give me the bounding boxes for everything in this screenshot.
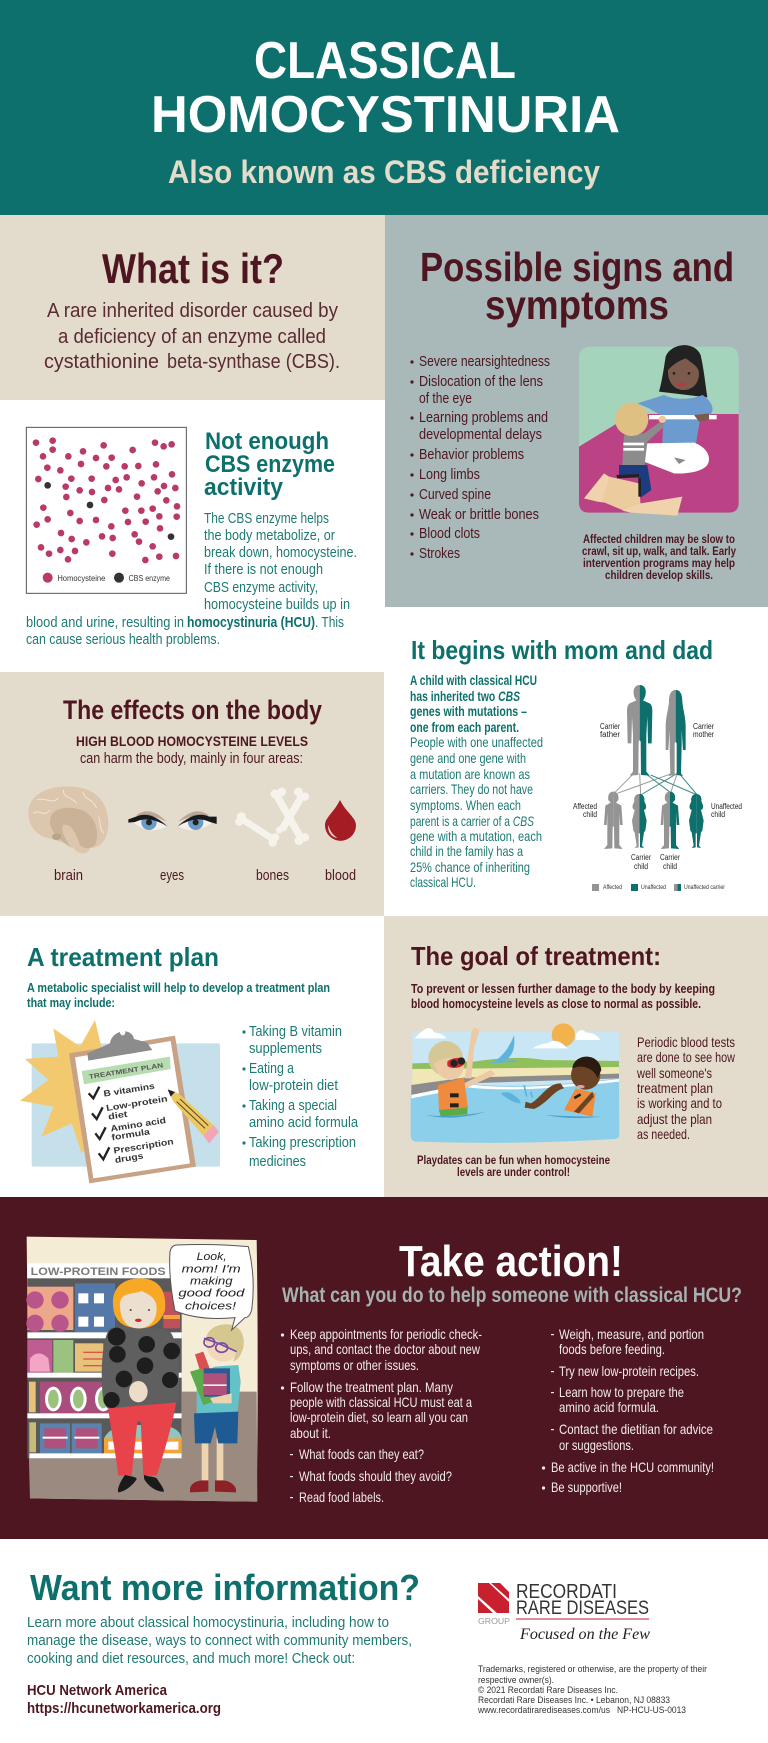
list: symptoms: Blood clots <box>419 525 480 542</box>
logo: Recordati Rare Diseases: RARE DISEASES <box>516 1598 649 1619</box>
heading: not enough CBS enzyme activity: CBS enzyme <box>205 451 335 478</box>
illustration: clipboard with treatment plan: Prescription <box>113 1136 174 1156</box>
chart: inheritance pedigree: Carrier <box>660 853 680 862</box>
chart: inheritance pedigree: child <box>634 862 648 871</box>
list: symptoms: Curved spine <box>419 486 491 503</box>
logo: Recordati Rare Diseases: Focused on the Few <box>519 1626 650 1643</box>
heading: not enough CBS enzyme activity: Not enough <box>205 428 329 455</box>
labels: body areas: eyes <box>160 867 184 884</box>
text: treatment plan intro: that may include: <box>27 996 115 1010</box>
chart: homocysteine dot diagram: Homocysteine <box>57 574 106 583</box>
list: treatment items: Taking B vitamin <box>249 1023 342 1040</box>
heading: effects on the body: The effects on the body <box>63 695 322 725</box>
caption: affected children: Affected children may be slow to <box>583 532 735 546</box>
illustration: low-protein foods aisle: mom! I'm <box>182 1263 241 1275</box>
panel: take action <box>0 1197 768 1539</box>
list: actions left column: low-protein diet, so learn all you can <box>290 1409 468 1425</box>
text: CBS enzyme explanation: break down, homocysteine. <box>204 544 357 561</box>
illustration: clipboard with treatment plan: diet <box>107 1109 128 1122</box>
text: periodic blood tests: is working and to <box>637 1095 722 1111</box>
caption: affected children: intervention programs may help <box>583 556 735 570</box>
list: treatment items <box>242 1023 359 1170</box>
text: periodic blood tests: Periodic blood tests <box>637 1034 735 1050</box>
illustration: clipboard with treatment plan: Amino acid <box>110 1115 167 1134</box>
legend: pedigree <box>592 884 725 891</box>
text: legal notice: www.recordatirarediseases.com/us <box>477 1705 610 1715</box>
legend: pedigree: Affected <box>603 885 622 891</box>
list: symptoms: Severe nearsightedness <box>419 353 550 370</box>
text: periodic blood tests <box>636 1034 736 1142</box>
text: periodic blood tests: treatment plan <box>637 1080 713 1096</box>
list: actions left column: Follow the treatment plan. Many <box>290 1379 453 1395</box>
text: definition: cystathionine <box>44 351 159 373</box>
text: definition: beta-synthase (CBS). <box>167 351 340 373</box>
list: actions right column: Learn how to prepare the <box>559 1384 684 1400</box>
text: inheritance explanation: child in the family has a <box>410 843 523 859</box>
list: symptoms: developmental delays <box>419 426 542 443</box>
list: actions left column: Read food labels. <box>299 1489 384 1505</box>
heading: want more information: Want more information? <box>30 1567 420 1608</box>
chart: inheritance pedigree: father <box>600 730 620 739</box>
title <box>151 32 620 144</box>
text: goal statement: To prevent or lessen further damage to the body by keeping <box>411 982 715 996</box>
illustration: low-protein foods aisle: LOW-PROTEIN FOODS <box>31 1266 166 1278</box>
caption: playdates: Playdates can be fun when homocysteine <box>417 1153 610 1167</box>
panel: want more information <box>0 1539 768 1743</box>
text: inheritance explanation: one from each parent. <box>410 719 519 735</box>
text: learn more: Learn more about classical homocystinuria, including how to <box>27 1614 389 1631</box>
text: treatment plan intro: A metabolic specialist will help to develop a treatment plan <box>27 981 330 995</box>
list: actions right column <box>542 1326 714 1495</box>
text: inheritance explanation: a mutation are known as <box>410 766 530 782</box>
list: actions left column: about it. <box>290 1425 331 1441</box>
text: legal notice: Recordati Rare Diseases Inc. • Lebanon, NJ 08833 <box>478 1695 670 1705</box>
text: inheritance explanation: carriers. They do not have <box>410 781 533 797</box>
illustration: clipboard with treatment plan: drugs <box>114 1151 144 1165</box>
chart: inheritance pedigree: Affected <box>573 802 597 811</box>
list: actions left column <box>281 1326 482 1505</box>
list: actions right column: Weigh, measure, and portion <box>559 1326 704 1342</box>
list: treatment items: Taking prescription <box>249 1134 356 1151</box>
text: inheritance explanation: classical HCU. <box>410 874 476 890</box>
list: actions right column: foods before feeding. <box>559 1341 665 1357</box>
text: treatment plan intro <box>27 981 330 1010</box>
list: treatment items: Taking a special <box>249 1097 337 1114</box>
text: inheritance explanation: gene and one gene with <box>410 750 526 766</box>
text: inheritance explanation: parent is a carrier of a CBS <box>410 813 534 829</box>
list: treatment items: medicines <box>249 1153 306 1170</box>
panel: the goal of treatment <box>384 916 768 1197</box>
list: actions left column: Keep appointments for periodic check- <box>290 1326 482 1342</box>
text: high blood homocysteine levels: can harm the body, mainly in four areas: <box>80 750 303 767</box>
text: high blood homocysteine levels: HIGH BLOOD HOMOCYSTEINE LEVELS <box>76 733 308 749</box>
text: inheritance explanation: gene with a mutation, each <box>410 828 542 844</box>
illustration: clipboard with treatment plan: B vitamins <box>103 1081 156 1099</box>
text: HCU Network America link: HCU Network America <box>27 1682 168 1699</box>
subtitle: Also known as CBS deficiency <box>168 154 600 190</box>
text: inheritance explanation: has inherited two CBS <box>410 688 520 704</box>
illustration: clipboard with treatment plan <box>20 1020 220 1183</box>
list: symptoms: Learning problems and <box>419 409 548 426</box>
panel: what is it <box>0 215 385 400</box>
text: definition <box>44 300 340 373</box>
text: goal statement: blood homocysteine levels as close to normal as possible. <box>411 997 701 1011</box>
text: learn more: manage the disease, ways to connect with community members, <box>27 1632 412 1649</box>
heading: possible signs and symptoms: symptoms <box>485 282 669 328</box>
text: definition: A rare inherited disorder caused by <box>47 300 338 322</box>
text: CBS enzyme explanation: blood and urine, resulting in <box>26 614 184 631</box>
legend: pedigree: Unaffected <box>641 885 666 891</box>
caption: affected children: crawl, sit up, walk, and talk. Early <box>582 544 736 558</box>
chart: inheritance pedigree: Unaffected <box>711 802 742 811</box>
heading: it begins with mom and dad: It begins with mom and dad <box>411 635 713 665</box>
text: periodic blood tests: well someone's <box>636 1065 712 1081</box>
list: treatment items: low-protein diet <box>249 1077 339 1094</box>
chart: inheritance pedigree: mother <box>693 730 714 739</box>
list: actions right column: Contact the dietitian for advice <box>559 1421 713 1437</box>
legend: pedigree: Unaffected carrier <box>684 885 725 891</box>
list: actions right column: or suggestions. <box>559 1437 634 1453</box>
text: CBS enzyme explanation: homocysteine builds up in <box>204 596 350 613</box>
list: actions right column: amino acid formula. <box>559 1399 659 1415</box>
text: HCU Network America link <box>27 1682 221 1717</box>
labels: body areas: bones <box>256 867 289 884</box>
text: inheritance explanation: A child with classical HCU <box>410 672 537 688</box>
labels: body areas: brain <box>54 867 83 884</box>
list: treatment items: amino acid formula <box>249 1114 359 1131</box>
logo: Recordati Rare Diseases <box>478 1580 650 1643</box>
illustration: low-protein foods aisle: making <box>190 1275 233 1287</box>
illustration: low-protein foods aisle <box>26 1237 258 1502</box>
text: periodic blood tests: adjust the plan <box>637 1111 712 1127</box>
illustration: mother and child <box>579 345 739 516</box>
icon: brain <box>28 786 108 853</box>
icon: eyes <box>128 811 217 830</box>
text: inheritance explanation: People with one unaffected <box>410 734 543 750</box>
text: inheritance explanation <box>410 672 543 890</box>
chart: inheritance pedigree: child <box>711 810 725 819</box>
illustration: low-protein foods aisle: good food <box>178 1288 245 1300</box>
text: periodic blood tests: are done to see how <box>637 1049 736 1065</box>
text: legal notice: NP-HCU-US-0013 <box>617 1705 686 1715</box>
text: inheritance explanation: 25% chance of inheriting <box>410 859 530 875</box>
chart: homocysteine dot diagram: CBS enzyme <box>129 574 170 583</box>
list: symptoms: of the eye <box>419 390 472 407</box>
title: HOMOCYSTINURIA <box>151 86 620 144</box>
illustration: clipboard with treatment plan: TREATMENT PLAN <box>89 1062 164 1081</box>
text: CBS enzyme explanation: homocystinuria (HCU) <box>187 614 315 631</box>
list: actions left column: What foods should they avoid? <box>299 1468 452 1484</box>
chart: homocysteine dot diagram <box>26 427 186 593</box>
panel: possible signs and symptoms <box>385 215 768 607</box>
text: legal notice <box>477 1664 707 1715</box>
text: goal statement <box>411 982 715 1011</box>
text: CBS enzyme explanation: . This <box>315 614 344 631</box>
text: CBS enzyme explanation: If there is not enough <box>204 561 323 578</box>
list: actions left column: people with classical HCU must eat a <box>290 1394 472 1410</box>
panel: a treatment plan <box>0 916 384 1197</box>
list: actions right column: Try new low-protein recipes. <box>559 1363 699 1379</box>
list: actions right column: Be active in the HCU community! <box>551 1459 714 1475</box>
text: legal notice: © 2021 Recordati Rare Diseases Inc. <box>478 1685 618 1695</box>
heading: what is it: What is it? <box>102 245 284 292</box>
text: HCU Network America link: https://hcunetworkamerica.org <box>27 1700 221 1717</box>
list: symptoms <box>410 353 550 562</box>
heading: take action: Take action! <box>399 1237 623 1286</box>
logo: Recordati Rare Diseases: GROUP <box>478 1617 510 1626</box>
chart: inheritance pedigree: Carrier <box>631 853 651 862</box>
list: actions right column: Be supportive! <box>551 1479 622 1495</box>
heading: the goal of treatment: The goal of treatment: <box>411 941 661 971</box>
text: definition: a deficiency of an enzyme called <box>58 326 326 348</box>
heading: not enough CBS enzyme activity: activity <box>204 474 284 501</box>
labels: body areas: blood <box>325 867 356 884</box>
icon: blood drop <box>325 800 356 841</box>
list: treatment items: Eating a <box>249 1060 295 1077</box>
title: CLASSICAL <box>254 32 516 90</box>
caption: affected children: children develop skills. <box>605 568 713 582</box>
text: learn more <box>27 1614 412 1667</box>
illustration: kids playing in pool <box>411 1023 619 1143</box>
illustration: low-protein foods aisle: choices! <box>185 1300 237 1312</box>
text: CBS enzyme explanation: CBS enzyme activity, <box>204 579 318 596</box>
list: treatment items: supplements <box>249 1040 322 1057</box>
caption: affected children <box>582 532 736 582</box>
caption: playdates: levels are under control! <box>457 1165 570 1179</box>
heading: a treatment plan: A treatment plan <box>27 942 219 972</box>
chart: inheritance pedigree: child <box>663 862 677 871</box>
illustration: low-protein foods aisle: Look, <box>197 1251 227 1263</box>
list: actions left column: What foods can they eat? <box>299 1446 424 1462</box>
panel: header banner <box>0 0 768 215</box>
list: symptoms: Dislocation of the lens <box>419 373 543 390</box>
icon: bones <box>235 788 309 847</box>
text: CBS enzyme explanation <box>26 510 357 648</box>
text: inheritance explanation: genes with mutations – <box>410 703 527 719</box>
list: symptoms: Weak or brittle bones <box>419 506 539 523</box>
text: high blood homocysteine levels <box>76 733 308 767</box>
text: CBS enzyme explanation: The CBS enzyme helps <box>204 510 329 527</box>
panel: it begins with mom and dad <box>385 607 768 916</box>
heading: not enough CBS enzyme activity <box>204 428 335 501</box>
text: CBS enzyme explanation: the body metabolize, or <box>204 527 335 544</box>
text: legal notice: respective owner(s). <box>478 1675 554 1685</box>
panel: not enough CBS enzyme activity <box>0 400 385 672</box>
list: symptoms: Long limbs <box>419 466 480 483</box>
chart: inheritance pedigree: Carrier <box>600 722 620 731</box>
list: symptoms: Strokes <box>419 545 460 562</box>
text: periodic blood tests: as needed. <box>637 1126 690 1142</box>
heading: possible signs and symptoms <box>420 244 734 328</box>
illustration: clipboard with treatment plan: Low-protein <box>105 1093 168 1113</box>
chart: inheritance pedigree: child <box>583 810 597 819</box>
chart: inheritance pedigree: Carrier <box>693 722 714 731</box>
panel: the effects on the body <box>0 672 384 916</box>
caption: playdates <box>417 1153 610 1179</box>
text: CBS enzyme explanation: can cause serious health problems. <box>26 631 220 648</box>
chart: inheritance pedigree <box>573 685 742 891</box>
text: learn more: cooking and diet resources, and much more! Check out: <box>27 1650 355 1667</box>
labels: body areas <box>54 867 356 884</box>
text: inheritance explanation: symptoms. When each <box>410 797 521 813</box>
list: actions left column: ups, and contact the doctor about new <box>290 1341 481 1357</box>
list: actions left column: symptoms or other issues. <box>290 1357 419 1373</box>
logo: Recordati Rare Diseases: RECORDATI <box>516 1580 617 1603</box>
text: legal notice: Trademarks, registered or otherwise, are the property of their <box>478 1664 707 1674</box>
illustration: clipboard with treatment plan: formula <box>111 1126 151 1142</box>
list: symptoms: Behavior problems <box>419 446 524 463</box>
